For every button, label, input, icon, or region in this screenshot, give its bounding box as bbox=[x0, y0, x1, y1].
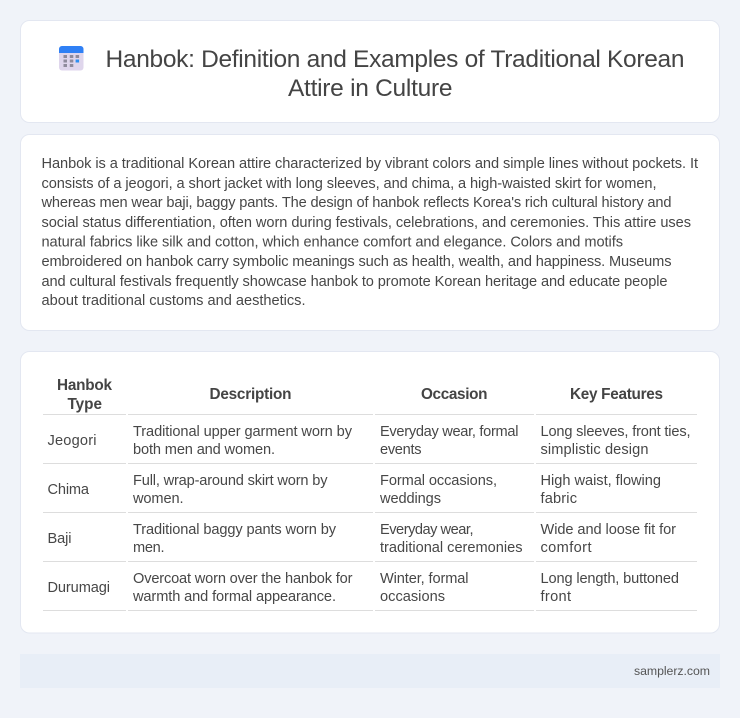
table header row: Key Features bbox=[570, 386, 663, 403]
text block: hanbok overview: natural fabrics like silk and cotton, which enhance comfort and elegance. Colors and motifs bbox=[42, 234, 623, 250]
table row: Durumagi: Long length, buttoned bbox=[540, 571, 679, 587]
panel: title header bbox=[20, 20, 720, 122]
table row: Baji: comfort bbox=[540, 540, 592, 556]
table row: Baji: Baji bbox=[48, 531, 72, 547]
table row: Jeogori: events bbox=[380, 442, 422, 458]
table row: Chima: Formal occasions, bbox=[380, 473, 497, 489]
panel: description paragraph bbox=[20, 134, 720, 330]
table header row: Type bbox=[68, 396, 102, 413]
text block: hanbok overview: embroidered on hanbok carry symbolic meanings such as health, wealth, and happiness. Museums bbox=[42, 254, 672, 270]
table row: Baji: traditional ceremonies bbox=[380, 540, 522, 556]
table row: Durumagi: Overcoat worn over the hanbok for bbox=[133, 571, 353, 587]
text block: hanbok overview: about traditional customs and aesthetics. bbox=[42, 293, 306, 309]
icon: calendar bbox=[59, 46, 84, 70]
table row: Chima: High waist, flowing bbox=[540, 473, 661, 489]
table row: Jeogori: Long sleeves, front ties, bbox=[540, 424, 690, 440]
table row: Durumagi bbox=[43, 571, 697, 611]
footer source text: samplerz.com bbox=[634, 664, 710, 678]
text block: hanbok overview: Hanbok is a traditional Korean attire characterized by vibrant colors and simple lines without pockets. It bbox=[42, 156, 698, 172]
table row: Baji bbox=[43, 522, 697, 562]
table row: Chima: Chima bbox=[48, 482, 90, 498]
table row: Chima bbox=[43, 473, 697, 513]
table row: Durumagi: front bbox=[540, 589, 571, 605]
table row: Durumagi: occasions bbox=[380, 589, 445, 605]
table header row: Occasion bbox=[421, 386, 488, 403]
table row: Baji: Traditional baggy pants worn by bbox=[133, 522, 337, 538]
text block: hanbok overview: and cultural festivals frequently showcase hanbok to promote Korean heritage and educate people bbox=[42, 274, 668, 290]
table row: Chima: fabric bbox=[540, 491, 577, 507]
table row: Chima: Full, wrap-around skirt worn by bbox=[133, 473, 328, 489]
text block: hanbok overview: consists of a jeogori, a short jacket with long sleeves, and chima, a high-waisted skirt for women, bbox=[42, 176, 656, 192]
footer bar bbox=[20, 654, 720, 688]
table row: Jeogori bbox=[43, 424, 697, 464]
table row: Jeogori: both men and women. bbox=[133, 442, 275, 458]
table row: Durumagi: Winter, formal bbox=[380, 571, 468, 587]
table row: Jeogori: simplistic design bbox=[540, 442, 648, 458]
table row: Durumagi: warmth and formal appearance. bbox=[132, 589, 336, 605]
text block: hanbok overview: social status differentiation, often worn during festivals, celebrations, and ceremonies. This attire uses bbox=[42, 215, 691, 231]
table row: Baji: Everyday wear, bbox=[380, 522, 474, 538]
table header row: Hanbok bbox=[57, 377, 112, 394]
table row: Jeogori: Jeogori bbox=[48, 433, 96, 449]
title bbox=[106, 46, 684, 102]
table row: Baji: Wide and loose fit for bbox=[540, 522, 676, 538]
panel: hanbok types table bbox=[20, 352, 720, 633]
table row: Durumagi: Durumagi bbox=[48, 580, 110, 596]
title: Hanbok: Definition and Examples of Traditional Korean bbox=[106, 46, 684, 73]
table header row bbox=[43, 377, 697, 415]
table row: Jeogori: Everyday wear, formal bbox=[380, 424, 518, 440]
text block: hanbok overview: whereas men wear baji, baggy pants. The design of hanbok reflects Korea's rich cultural history and bbox=[40, 195, 672, 211]
text block: hanbok overview bbox=[40, 156, 698, 309]
title: Attire in Culture bbox=[288, 75, 452, 102]
table row: Jeogori: Traditional upper garment worn by bbox=[133, 424, 353, 440]
table row: Chima: women. bbox=[132, 491, 184, 507]
table header row: Description bbox=[210, 386, 292, 403]
table row: Chima: weddings bbox=[379, 491, 441, 507]
table row: Baji: men. bbox=[133, 540, 164, 556]
